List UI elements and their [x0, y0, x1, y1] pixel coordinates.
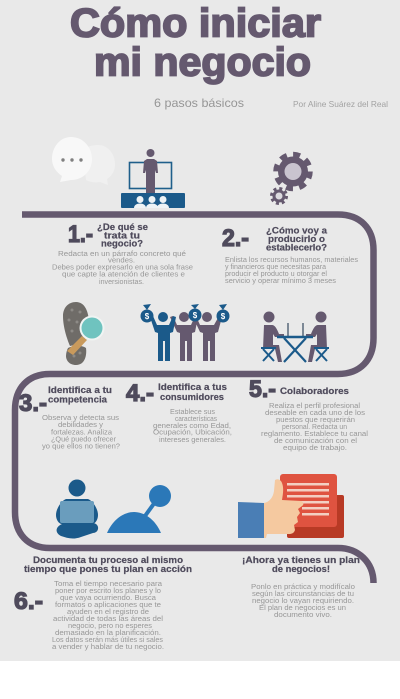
step 6 text: formatos o aplicaciones que te	[55, 602, 161, 609]
closing message	[242, 555, 360, 619]
step 1 heading: ¿De qué se	[97, 222, 148, 232]
step 6 text: negocio, pero no esperes	[68, 623, 153, 630]
step 4 heading	[158, 382, 227, 402]
step 3 text: yo que ellos no tienen?	[42, 444, 120, 450]
step 2 text: Enlista los recursos humanos, materiales	[225, 257, 359, 264]
step 2 heading: producirlo o	[268, 234, 326, 244]
title: mi negocio	[94, 40, 311, 84]
icon: team holding money bags: $	[221, 312, 226, 321]
step 4 number: 4.-	[126, 380, 154, 407]
step 6 heading: Documenta tu proceso al mismo	[33, 555, 184, 565]
step 5 text	[261, 403, 368, 452]
closing text: documento vivo.	[274, 612, 332, 619]
step 4 text: características	[175, 416, 217, 423]
step 3 heading: Identifica a tu	[48, 385, 112, 395]
step 4	[126, 380, 232, 444]
step 4 text	[153, 409, 232, 444]
step 1 text: inversionistas.	[99, 279, 144, 286]
step 6 text: que vaya ocurriendo. Busca	[60, 595, 156, 602]
subtitle: 6 pasos básicos	[154, 96, 244, 110]
step 6 text: Los datos serán más útiles si sales	[52, 637, 163, 644]
icon: joystick	[107, 485, 171, 533]
step 5 text: deseable en cada uno de los	[265, 410, 366, 417]
winding path line	[15, 214, 374, 583]
step 6	[14, 555, 192, 651]
step 4 heading: Identifica a tus	[158, 382, 227, 392]
step 5 number: 5.-	[249, 376, 276, 403]
step 1 text: Redacta en un párrafo concreto qué	[58, 251, 186, 258]
step 4 text: intereses generales.	[159, 437, 226, 444]
step 1 text: que capte la atención de clientes e	[62, 272, 185, 278]
closing heading	[242, 555, 360, 574]
icon: gears	[272, 154, 310, 204]
step 2 heading: establecerlo?	[266, 242, 327, 252]
step 2 heading: ¿Cómo voy a	[266, 226, 328, 236]
step 1 heading: trata tu	[104, 230, 140, 240]
author credit: Por Aline Suárez del Real	[293, 99, 388, 109]
step 4 heading: consumidores	[160, 392, 224, 402]
step 6 heading: tiempo que pones tu plan en acción	[24, 564, 192, 574]
step 5 text: equipo de trabajo.	[283, 445, 347, 452]
step 3 heading: competencia	[48, 394, 108, 404]
step 1 text	[52, 251, 193, 286]
step 3 text: debilidades y	[58, 422, 104, 429]
step 1	[52, 221, 193, 286]
step 5	[249, 376, 368, 452]
icon: speech bubbles	[52, 137, 115, 185]
step 2 text: servicio y operar mínimo 3 meses	[225, 278, 337, 285]
icon: thumbs up with documents	[238, 474, 344, 538]
step 3 heading	[48, 385, 112, 404]
title: Cómo iniciar	[70, 2, 321, 46]
step 3 text: fortalezas. Analiza	[51, 430, 112, 436]
step 6 text: poner por escrito los planes y lo	[55, 588, 161, 595]
step 6 text: actividad de todas las áreas del	[53, 616, 163, 623]
step 1 text: vendes.	[108, 258, 135, 264]
icon: team holding money bags: $	[193, 311, 198, 320]
closing text: según las circunstancias de tu	[252, 591, 354, 598]
step 5 text: puestos que requerirán	[276, 417, 355, 424]
step 6 number: 6.-	[14, 588, 43, 615]
icon: person reading cross-legged	[56, 480, 98, 539]
step 2 number: 2.-	[222, 225, 249, 252]
closing heading: ¡Ahora ya tienes un plan	[242, 555, 360, 565]
icon: two people at a table	[261, 312, 329, 362]
step 1 number: 1.-	[68, 221, 93, 248]
step 3 text: ¿Qué puedo ofrecer	[51, 436, 117, 444]
closing text	[251, 584, 355, 619]
step 6 text	[52, 581, 164, 651]
icon: team holding money bags: $	[145, 312, 150, 321]
step 6 text: demasiado en la planificación.	[55, 630, 161, 637]
step 3 text	[42, 415, 120, 450]
step 4 text: Ocupación, Ubicación,	[153, 430, 232, 436]
closing heading: de negocios!	[272, 564, 330, 574]
step 2 text	[225, 257, 359, 285]
step 6 text: Toma el tiempo necesario para	[54, 581, 162, 588]
step 5 text: Realiza el perfil profesional	[269, 403, 360, 410]
step 4 text: generales como Edad,	[153, 423, 231, 430]
step 1 heading: negocio?	[101, 238, 143, 248]
closing text: El plan de negocios es un	[259, 605, 346, 612]
step 5 text: de comunicación con el	[274, 438, 358, 445]
step 2 text: producir el producto u otorgar el	[225, 271, 327, 278]
step 4 text: Establece sus	[170, 409, 216, 416]
step 6 heading	[24, 555, 192, 574]
closing text: Ponlo en práctica y modifícalo	[251, 584, 355, 591]
step 5 heading: Colaboradores	[280, 386, 349, 396]
icon: presenter on stage	[121, 149, 185, 208]
step 5 text: personal. Redacta un	[282, 424, 347, 431]
step 2	[222, 225, 359, 285]
step 2 text: y financieros que necesitas para	[225, 264, 326, 271]
step 1 heading	[97, 222, 148, 248]
title	[70, 2, 321, 84]
step 6 text: a vender y hablar de tu negocio.	[52, 644, 164, 651]
icon: team holding money bags	[140, 304, 230, 361]
step 3	[19, 385, 120, 450]
step 1 text: Debes poder expresarlo en una sola frase	[52, 264, 193, 272]
step 2 heading	[266, 226, 328, 252]
step 3 number: 3.-	[19, 390, 47, 417]
step 3 text: Observa y detecta sus	[42, 415, 120, 422]
step 6 text: ayuden en el registro de	[67, 609, 149, 616]
icon: shoe sole and magnifier	[63, 302, 104, 365]
closing text: negocio lo vayan requiriendo.	[252, 598, 354, 605]
step 5 text: reglamento. Establece tu canal	[261, 431, 368, 438]
